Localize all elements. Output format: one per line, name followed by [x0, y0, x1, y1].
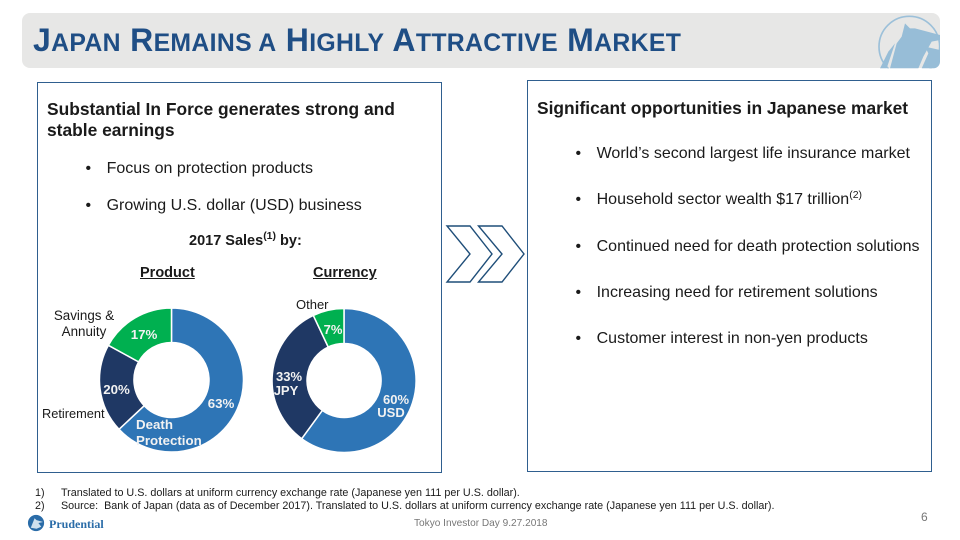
panel: left earnings panel: [37, 82, 442, 473]
event footer: Tokyo Investor Day 9.27.2018: [414, 518, 548, 529]
bullet: second largest market: • World’s second largest life insurance market: [576, 144, 910, 162]
segment: JPY 33%: [272, 315, 328, 439]
donut chart: currency: [272, 297, 416, 452]
label: retirement: Retirement: [42, 406, 105, 421]
chart labels: 33%: [276, 369, 302, 384]
left heading: [47, 98, 395, 140]
segment: retirement 20%: [99, 345, 144, 429]
title: JAPAN REMAINS A HIGHLY ATTRACTIVE MARKET: [33, 22, 681, 58]
segment: USD 60%: [302, 308, 416, 452]
bullet: protection products: • Focus on protection products: [86, 160, 313, 176]
bullet: death protection: • Continued need for death protection solutions: [576, 238, 920, 254]
logo wordmark: Prudential: [49, 517, 104, 531]
label: savings and annuity: [54, 308, 114, 339]
footnote 1: 1): [35, 487, 45, 499]
left heading: stable earnings: [47, 120, 175, 140]
chart labels: 20%: [103, 382, 130, 397]
bullet: non-yen products: • Customer interest in non-yen products: [576, 330, 868, 347]
left heading: Substantial In Force generates strong and: [47, 98, 395, 118]
chart labels: [103, 327, 234, 448]
product chart heading: Product: [140, 265, 195, 281]
footnotes: Source: Bank of Japan (data as of December 2017). Translated to U.S. dollars at uniform currency exchange rate (Japanese yen 111 per U.S. dollar).: [61, 500, 775, 512]
right bullet list: [576, 144, 920, 347]
footnotes: [35, 487, 775, 512]
chart labels: Protection: [136, 433, 202, 448]
footnote 1: [35, 487, 520, 499]
chart labels: Death: [136, 417, 173, 432]
panel: right opportunities panel: [527, 80, 932, 472]
footnote 2: [35, 500, 775, 512]
chevron: second: [478, 226, 524, 282]
chart labels: 7%: [324, 322, 343, 337]
left bullet list: [86, 160, 362, 214]
label: savings and annuity: Savings &: [54, 308, 114, 323]
bullet: retirement: • Increasing need for retirement solutions: [576, 284, 878, 300]
chart labels: 60%: [383, 392, 409, 407]
segment: other 7%: [313, 308, 344, 347]
chart labels: [274, 322, 409, 420]
page number: 6: [921, 510, 928, 524]
chart labels: USD: [377, 405, 405, 420]
segment: death protection 63%: [119, 308, 243, 452]
label: savings and annuity: Annuity: [62, 324, 107, 339]
icon: Prudential logo mark: [28, 514, 44, 532]
chevron: first: [447, 226, 492, 282]
arrows: double chevron: [446, 225, 525, 283]
bullet: household wealth: • Household sector wealth $17 trillion(2): [576, 188, 862, 208]
donut chart: product: [42, 308, 243, 452]
title banner: [22, 13, 940, 68]
sales heading: 2017 Sales(1) by:: [189, 230, 302, 249]
label: other: Other: [296, 297, 329, 312]
segment: savings and annuity 17%: [108, 308, 172, 362]
footnotes: Translated to U.S. dollars at uniform currency exchange rate (Japanese yen 111 per U.S. dollar).: [61, 487, 520, 499]
right heading: Significant opportunities in Japanese market: [537, 98, 908, 118]
chart labels: 63%: [208, 396, 234, 411]
icon: Prudential rock logo watermark: [878, 16, 940, 68]
chart labels: JPY: [274, 383, 299, 398]
bullet: USD business: • Growing U.S. dollar (USD) business: [86, 196, 362, 214]
currency chart heading: Currency: [313, 265, 377, 281]
footnote 2: 2): [35, 500, 45, 512]
chart labels: 17%: [131, 327, 157, 342]
